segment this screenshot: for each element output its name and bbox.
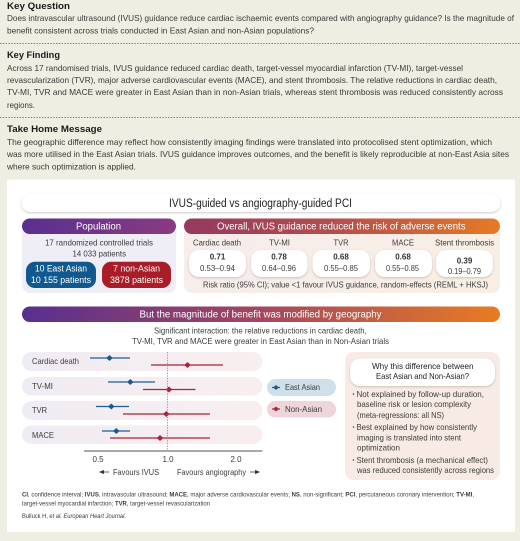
text block: key finding: TV-MI, TVR and MACE were greater in East Asian than in non-Asian trials, whereas stent thrombosis was reduced consistently across	[7, 87, 503, 97]
text block: take home message: Take Home Message	[7, 124, 102, 135]
text block: key question	[7, 1, 515, 36]
title pill	[22, 194, 500, 212]
text: significant interaction	[132, 326, 389, 346]
legend: non-asian: Non-Asian	[285, 405, 322, 414]
heading: geography banner	[22, 306, 500, 322]
text block: key question: benefit consistent across trials conducted in East Asian and non-Asian populations?	[7, 26, 314, 36]
arrow: favours angiography: Favours angiography	[177, 468, 246, 477]
heading: population	[22, 218, 176, 234]
panel: overall effect	[184, 218, 500, 293]
result: TVR: TVR	[334, 238, 349, 247]
panel: why this difference	[345, 352, 500, 480]
x axis: 1.0	[162, 455, 174, 464]
x axis	[84, 451, 262, 464]
result: MACE	[375, 238, 432, 277]
east asian trials badge	[26, 262, 96, 288]
text: trial count	[45, 238, 153, 259]
footnote: abbreviations: CI, confidence interval; IVUS, intravascular ultrasound; MACE, major adverse cardiovascular events; NS, non-significant; PCI, percutaneous coronary intervention; TV-MI,	[22, 492, 474, 499]
text block: key question: Does intravascular ultrasound (IVUS) guidance reduce cardiac ischaemic events compared with angiography guidance? Is the magnitude of	[7, 13, 515, 23]
title pill: IVUS-guided vs angiography-guided PCI	[169, 198, 352, 210]
row: TV-MI: TV-MI	[32, 381, 53, 391]
text block: key finding	[7, 50, 503, 110]
result: cardiac death: 0.53–0.94	[200, 264, 236, 273]
result: TV-MI	[251, 238, 308, 277]
row: MACE	[22, 426, 262, 444]
note: risk ratio: Risk ratio (95% CI); value <1 favour IVUS guidance, random-effects (REML + HKSJ)	[203, 281, 488, 290]
text block: take home message	[6, 124, 509, 172]
text block: key finding: revascularization (TVR), major adverse cardiovascular events (MACE), and stent thrombosis. The relative reductions in cardiac death,	[7, 75, 497, 85]
bullet: best explained: optimization	[357, 444, 400, 452]
non-asian trials badge: 7 non-Asian	[113, 264, 160, 274]
legend: non-asian	[267, 401, 336, 418]
text: significant interaction: TV-MI, TVR and MACE were greater in East Asian than in Non-Asian trials	[132, 337, 389, 346]
text block: take home message: was more utilised in the East Asian trials. IVUS guidance improves outcomes, and the benefit is likely reproducible at non-East Asia sites	[6, 149, 509, 159]
row: TVR	[22, 401, 262, 420]
result: cardiac death: Cardiac death	[193, 238, 241, 247]
row: cardiac death	[22, 352, 262, 371]
heading: population: Population	[76, 222, 121, 232]
text block: take home message: where such optimization is applied.	[6, 162, 136, 172]
row: MACE: MACE	[32, 430, 54, 440]
result: TVR	[312, 238, 370, 277]
text block: key finding: regions.	[7, 100, 35, 110]
text block: key finding: Key Finding	[7, 50, 60, 61]
text: significant interaction: Significant interaction: the relative reductions in cardiac death,	[154, 326, 367, 336]
bullet: not explained: baseline risk or lesion complexity	[357, 400, 472, 409]
bullet: stent thrombosis	[353, 456, 494, 475]
heading: geography banner: But the magnitude of benefit was modified by geography	[140, 310, 382, 320]
result: TV-MI: 0.78	[271, 253, 287, 262]
bullet: stent thrombosis: was reduced consistently across regions	[356, 466, 494, 475]
panel heading pill	[350, 358, 495, 386]
heading: overall effect: Overall, IVUS guidance reduced the risk of adverse events	[217, 222, 466, 232]
non-asian trials badge: 3878 patients	[110, 275, 163, 285]
text: trial count: 14 033 patients	[72, 250, 126, 259]
result: TVR: 0.68	[333, 253, 349, 262]
panel heading pill: East Asian and Non-Asian?	[376, 372, 469, 381]
heading: overall effect	[184, 218, 500, 234]
result: TVR: 0.55–0.85	[324, 264, 359, 273]
legend: east asian	[267, 379, 336, 396]
panel: graphical abstract	[7, 180, 515, 532]
east asian trials badge: 10 East Asian	[35, 264, 87, 274]
result: TV-MI: 0.64–0.96	[262, 264, 296, 273]
citation: Bulluck H, et al. European Heart Journal.	[22, 513, 126, 520]
bullet: best explained: imaging is translated into stent	[357, 434, 462, 442]
result: MACE: MACE	[392, 238, 414, 247]
text block: key finding: Across 17 randomised trials, IVUS guidance reduced cardiac death, target-vessel myocardial infarction (TV-MI), target-vessel	[7, 63, 463, 73]
text block: take home message: The geographic difference may reflect how consistently imaging findings were translated into protocolised stent optimization, which	[7, 137, 492, 147]
bullet: not explained: Not explained by follow-up duration,	[356, 390, 484, 399]
result: stent thrombosis: Stent thrombosis	[435, 238, 494, 247]
text: trial count: 17 randomized controlled trials	[45, 238, 153, 247]
result: cardiac death	[189, 238, 246, 277]
result: MACE: 0.68	[395, 253, 411, 262]
footnote: abbreviations: target-vessel myocardial infarction; TVR, target-vessel revascularization	[22, 500, 210, 507]
row: cardiac death: Cardiac death	[32, 356, 79, 366]
bullet: best explained: Best explained by how consistently	[356, 423, 478, 432]
result: stent thrombosis: 0.19–0.79	[448, 267, 481, 276]
bullet: not explained	[353, 390, 484, 420]
footnote: abbreviations	[22, 492, 474, 507]
x axis: 0.5	[92, 455, 104, 464]
x axis: 2.0	[230, 455, 242, 464]
result: TV-MI: TV-MI	[269, 238, 290, 247]
result: stent thrombosis: 0.39	[457, 257, 473, 266]
row: TVR: TVR	[32, 405, 47, 415]
result: stent thrombosis	[435, 238, 494, 277]
east asian trials badge: 10 155 patients	[31, 275, 91, 285]
text block: key question: Key Question	[7, 1, 70, 12]
bullet: stent thrombosis: Stent thrombosis (a mechanical effect)	[356, 456, 488, 465]
result: MACE: 0.55–0.85	[386, 264, 420, 273]
non-asian trials badge	[102, 262, 171, 288]
legend: east asian: East Asian	[285, 383, 320, 392]
row: TV-MI	[22, 377, 262, 396]
bullet: not explained: (meta-regressions: all NS)	[357, 411, 444, 420]
panel: population	[22, 218, 176, 293]
panel heading pill: Why this difference between	[372, 362, 474, 371]
arrow: favours IVUS: Favours IVUS	[113, 468, 159, 477]
bullet: best explained	[353, 423, 478, 452]
result: cardiac death: 0.71	[210, 253, 226, 262]
forest plot	[22, 352, 262, 477]
